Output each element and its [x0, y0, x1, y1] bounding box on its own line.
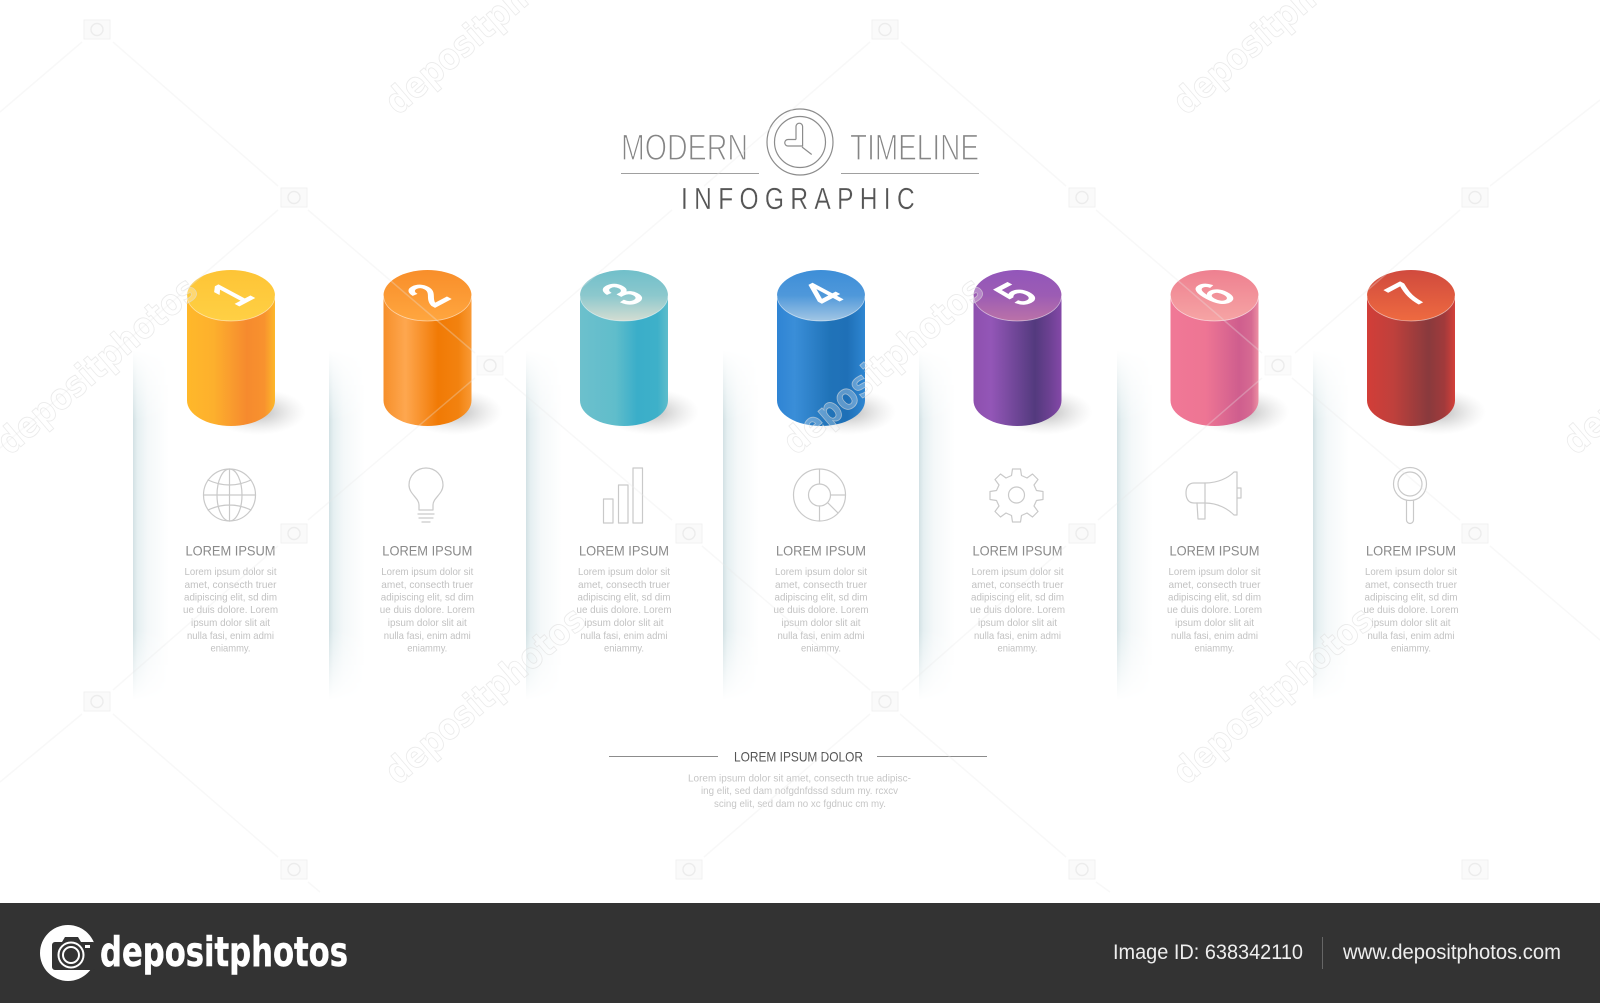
cylinder 1: 1	[198, 277, 265, 312]
cylinder 3 shadow	[603, 389, 699, 435]
cylinder 5: 5	[983, 277, 1050, 312]
icon: camera logo	[40, 925, 96, 981]
body text 2: eniammy.	[407, 642, 447, 654]
logo wordmark: depositphotos	[100, 928, 348, 976]
body text 6: nulla fasi, enim admi	[1171, 630, 1258, 642]
summary heading: LOREM IPSUM DOLOR	[734, 748, 863, 764]
body text 7: amet, consecth truer	[1365, 579, 1457, 591]
body text 1: eniammy.	[210, 642, 250, 654]
title underline left	[621, 172, 759, 174]
body text 5: amet, consecth truer	[972, 579, 1064, 591]
body text 2: amet, consecth truer	[381, 579, 474, 591]
cylinder 7 shadow	[1390, 389, 1486, 435]
body text 7: ue duis dolore. Lorem	[1364, 604, 1459, 616]
icon: globe	[204, 469, 256, 521]
body text 5: nulla fasi, enim admi	[974, 630, 1061, 642]
cylinder 3	[580, 270, 668, 426]
body text 4: adipiscing elit, sd dim	[774, 592, 868, 604]
body text 1	[183, 566, 278, 654]
body text 5: ue duis dolore. Lorem	[970, 604, 1065, 616]
body text 4: ipsum dolor slit ait	[782, 617, 861, 629]
body text 4: amet, consecth truer	[775, 579, 867, 591]
heading 3: LOREM IPSUM	[579, 542, 669, 558]
cylinder 1	[187, 270, 275, 426]
body text 6: amet, consecth truer	[1168, 579, 1261, 591]
title word: timeline: TIMELINE	[850, 126, 979, 168]
body text 5: eniammy.	[998, 642, 1038, 654]
cylinder 4: 4	[789, 277, 856, 312]
body text 4	[774, 566, 869, 654]
step 1 column	[183, 270, 306, 654]
step 5 column	[970, 270, 1092, 654]
body text 3: ipsum dolor slit ait	[584, 617, 664, 629]
body text 1: nulla fasi, enim admi	[187, 630, 274, 642]
cylinder 2 shadow	[406, 389, 502, 435]
body text 2: nulla fasi, enim admi	[384, 630, 471, 642]
body text 5: Lorem ipsum dolor sit	[972, 566, 1064, 578]
body text 6: eniammy.	[1194, 642, 1234, 654]
watermark wordmarks	[0, 0, 1600, 793]
summary body text: Lorem ipsum dolor sit amet, consecth true adipisc-	[688, 772, 911, 784]
summary body text	[688, 772, 911, 810]
body text 2	[380, 566, 475, 654]
body text 1: ipsum dolor slit ait	[191, 617, 270, 629]
body text 1: Lorem ipsum dolor sit	[184, 566, 277, 578]
cylinder 2: 2	[395, 278, 462, 313]
footer bar	[0, 903, 1600, 1003]
body text 7: nulla fasi, enim admi	[1368, 630, 1454, 642]
step 2 column	[380, 270, 502, 654]
bottom summary block	[609, 748, 987, 810]
cylinder 2	[384, 270, 472, 426]
body text 3: eniammy.	[604, 642, 644, 654]
image id: Image ID: 638342110	[1113, 941, 1303, 964]
cylinder 4 shadow	[800, 389, 896, 435]
body text 2: ue duis dolore. Lorem	[380, 604, 475, 616]
body text 2: adipiscing elit, sd dim	[381, 592, 474, 604]
cylinder 3: 3	[589, 277, 656, 312]
step 6 column	[1167, 270, 1290, 654]
watermark camera icons	[84, 20, 1488, 879]
body text 7: Lorem ipsum dolor sit	[1365, 566, 1457, 578]
watermark wordmarks: depositphotos	[1165, 599, 1382, 793]
cylinder 6 shadow	[1194, 389, 1290, 435]
title underline right	[841, 172, 979, 174]
body text 5: adipiscing elit, sd dim	[971, 592, 1064, 604]
icon: light bulb	[409, 468, 443, 522]
body text 2: ipsum dolor slit ait	[388, 617, 467, 629]
heading 7: LOREM IPSUM	[1366, 542, 1456, 558]
cylinder 1 shadow	[210, 389, 306, 435]
footer background	[0, 903, 1600, 1003]
subtitle: INFOGRAPHIC	[681, 181, 921, 216]
body text 6: ipsum dolor slit ait	[1175, 617, 1254, 629]
body text 6: adipiscing elit, sd dim	[1168, 592, 1261, 604]
heading 4: LOREM IPSUM	[776, 542, 866, 558]
title word: modern: MODERN	[621, 126, 748, 168]
heading 2: LOREM IPSUM	[382, 542, 472, 558]
body text 3: amet, consecth truer	[578, 579, 670, 591]
watermark wordmarks: depositphotos	[775, 269, 992, 463]
body text 3: ue duis dolore. Lorem	[576, 604, 672, 616]
body text 6: Lorem ipsum dolor sit	[1168, 566, 1261, 578]
body text 4: eniammy.	[801, 642, 841, 654]
body text 7	[1364, 566, 1459, 654]
summary body text: ing elit, sed dam nofgdnfdssd sdum my. rcxcv	[701, 785, 899, 797]
heading 1: LOREM IPSUM	[186, 542, 276, 558]
body text 6	[1167, 566, 1262, 654]
summary rule right	[877, 756, 987, 758]
cylinder 7	[1367, 270, 1455, 426]
cylinder 7: 7	[1374, 277, 1441, 312]
body text 4: nulla fasi, enim admi	[778, 630, 864, 642]
icon: bar chart	[604, 468, 642, 523]
icon: donut chart	[794, 469, 846, 521]
body text 3	[576, 566, 672, 654]
step 7 column	[1364, 270, 1486, 654]
body text 3: Lorem ipsum dolor sit	[578, 566, 670, 578]
body text 5	[970, 566, 1065, 654]
body text 4: Lorem ipsum dolor sit	[775, 566, 867, 578]
cylinder 5	[974, 270, 1062, 426]
cylinder 6: 6	[1181, 277, 1248, 312]
cylinder 6	[1170, 270, 1258, 426]
body text 1: amet, consecth truer	[184, 579, 277, 591]
body text 6: ue duis dolore. Lorem	[1167, 604, 1262, 616]
icon: magnifier	[1394, 468, 1426, 524]
cylinder 5 shadow	[996, 389, 1092, 435]
summary rule left	[609, 756, 718, 758]
body text 3: nulla fasi, enim admi	[580, 630, 668, 642]
cylinder 4	[777, 270, 865, 426]
icon: clock	[767, 109, 833, 175]
body text 7: adipiscing elit, sd dim	[1364, 592, 1458, 604]
summary body text: scing elit, sed dam no xc fgdnuc cm my.	[714, 798, 886, 810]
heading 5: LOREM IPSUM	[972, 542, 1062, 558]
step 3 column	[576, 270, 699, 654]
body text 7: ipsum dolor slit ait	[1372, 617, 1451, 629]
icon: megaphone	[1186, 472, 1241, 519]
website url: www.depositphotos.com	[1342, 941, 1561, 964]
body text 3: adipiscing elit, sd dim	[578, 592, 671, 604]
panel shadow strips	[133, 364, 1333, 686]
title block	[621, 109, 979, 216]
step 4 column	[774, 270, 896, 654]
body text 2: Lorem ipsum dolor sit	[381, 566, 473, 578]
footer divider	[1322, 937, 1324, 969]
heading 6: LOREM IPSUM	[1170, 542, 1260, 558]
body text 4: ue duis dolore. Lorem	[774, 604, 869, 616]
body text 1: ue duis dolore. Lorem	[183, 604, 278, 616]
body text 7: eniammy.	[1391, 642, 1431, 654]
watermark wordmarks: depositphotos	[377, 599, 594, 793]
body text 5: ipsum dolor slit ait	[978, 617, 1057, 629]
icon: gear	[990, 469, 1043, 522]
body text 1: adipiscing elit, sd dim	[184, 592, 277, 604]
